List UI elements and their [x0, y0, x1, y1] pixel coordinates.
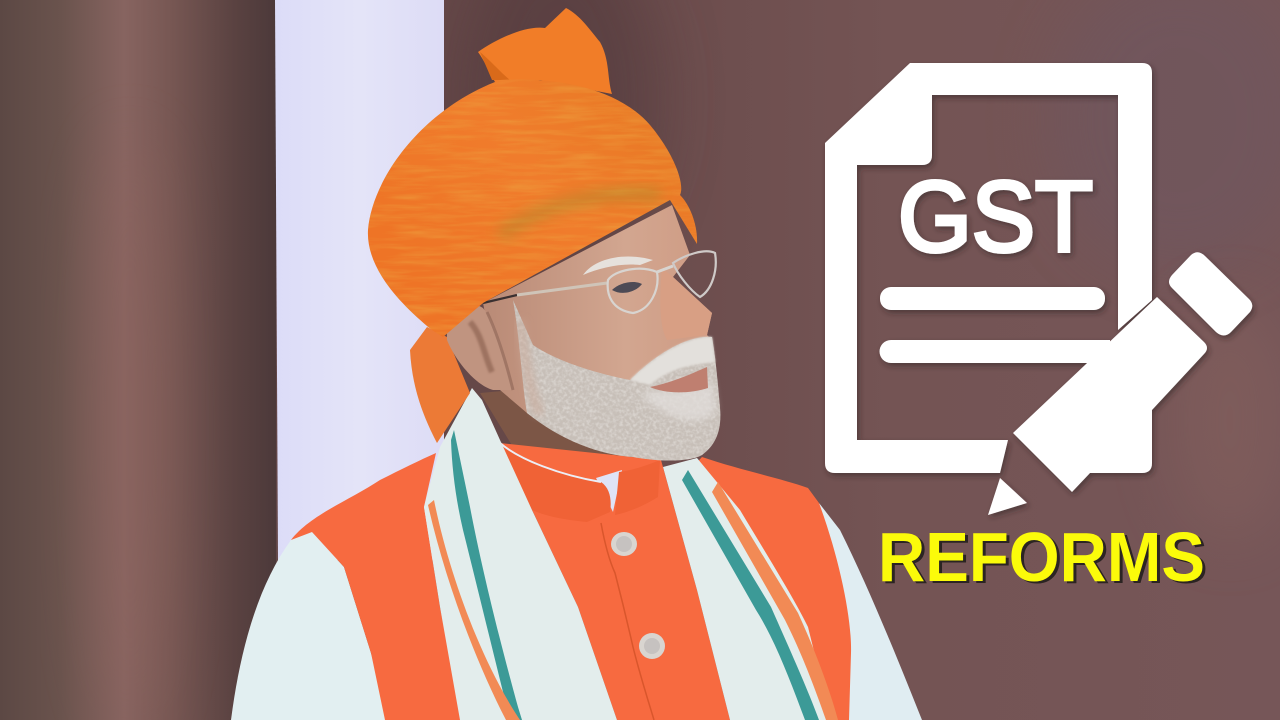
eye — [612, 282, 642, 293]
pencil eraser — [1169, 252, 1252, 336]
pencil tip — [988, 478, 1027, 515]
kurta buttons — [611, 532, 665, 659]
turban tail at back of neck — [410, 327, 470, 443]
REFORMS caption: REFORMS — [878, 518, 1205, 596]
shirt collar opening — [596, 470, 622, 512]
stole: right side — [663, 458, 838, 720]
head and face — [483, 205, 720, 457]
pencil body — [1013, 297, 1207, 492]
document text line — [880, 287, 1105, 310]
white pillar — [275, 0, 444, 560]
document text line — [880, 340, 1110, 363]
man in orange turban and vest — [231, 8, 922, 720]
eyebrow — [583, 256, 653, 275]
white kurta sleeves — [231, 503, 922, 720]
document heading: GST — [898, 161, 1093, 273]
neck — [480, 390, 640, 480]
stole: left side — [424, 388, 617, 720]
orange turban — [368, 8, 697, 337]
moustache — [630, 337, 715, 385]
document outline — [825, 63, 1152, 473]
white beard — [513, 300, 720, 460]
ear — [447, 303, 513, 390]
REFORMS caption: REFORMS — [881, 520, 1208, 598]
glasses — [483, 251, 716, 313]
orange vest panels — [291, 443, 851, 720]
mouth — [650, 367, 708, 392]
icon: GST document with pencil — [825, 63, 1252, 515]
vest collar and placket — [500, 443, 660, 720]
nose — [660, 268, 712, 340]
